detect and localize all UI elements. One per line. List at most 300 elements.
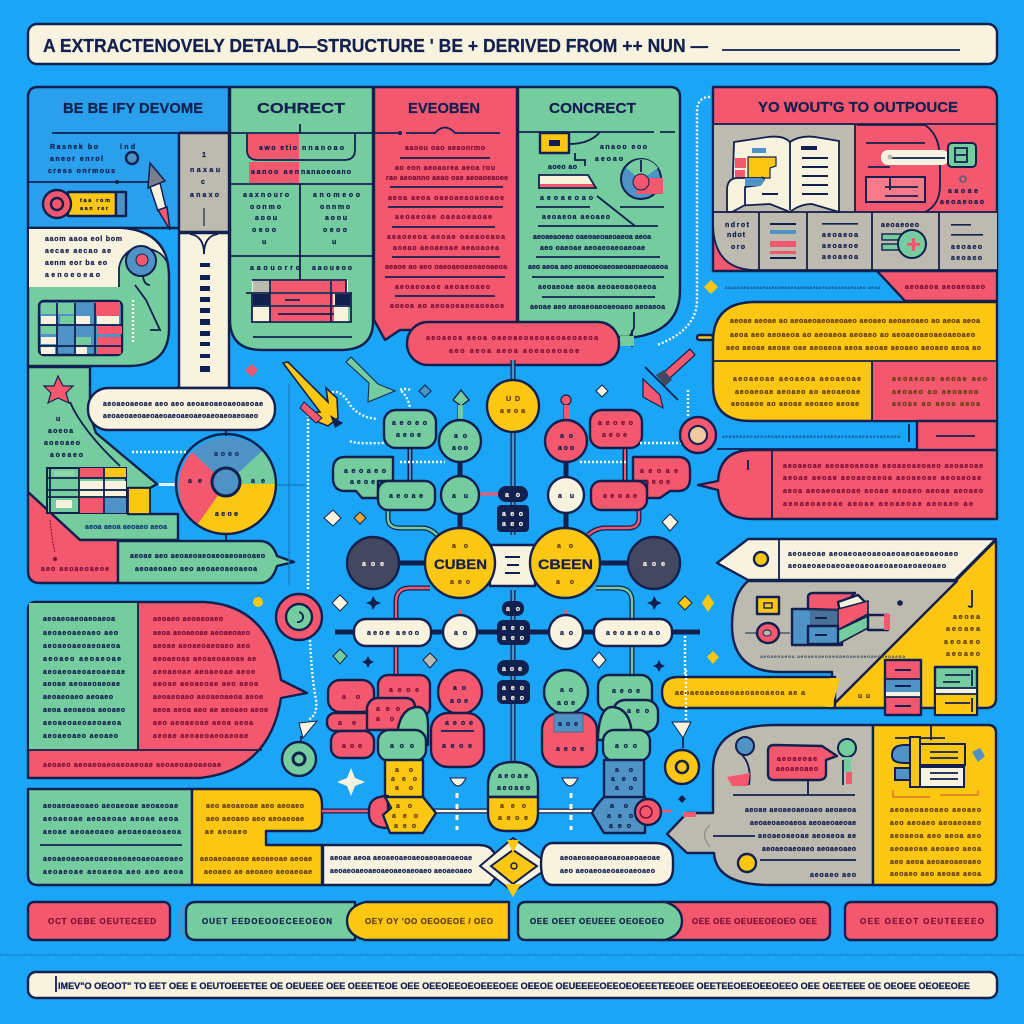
- white wedge icon: [539, 175, 596, 188]
- yellow block text: aeoaeoaeoae aeoaeoae aeoae: [200, 856, 312, 863]
- cream block text: aeoae aeoa aeoaeoaeoaeoaeoaeoaeoae: [330, 855, 472, 862]
- red boxes: aeoe: [645, 479, 670, 486]
- lower right green and blue stack: aeoe: [612, 688, 640, 695]
- panel: concrete column: aoeo ao: [548, 164, 577, 171]
- lower left red cluster: aeo: [376, 706, 400, 713]
- split red label: awo etio: [259, 145, 297, 152]
- cream pill: aeoaeoaeoae aeo aeo aeoaeoaeoaeoaeoae: [103, 401, 263, 408]
- panel: yellow text block: aeoa aeo aeoaeoa ao aeoaeoa aeoaeo ao aeoaeoaeoaeoaeoaeo: [730, 332, 975, 339]
- panel: correct column: [230, 87, 375, 350]
- grey text lines: [745, 807, 856, 879]
- green node 1: ao: [454, 433, 467, 440]
- icon: yellow square: [757, 597, 779, 614]
- pie chart: ae: [188, 478, 202, 485]
- panel: evidence column: [374, 87, 517, 340]
- yellow side text: aeoaeo: [946, 651, 980, 658]
- green node 1: [439, 420, 481, 462]
- green wedge panel: aoeoa: [48, 428, 73, 435]
- cream pointer: aeoaeoae aeoaeoaeoaeoaeoaeoaeoaeoaeo: [788, 551, 958, 558]
- cream column with vertical index: [179, 233, 229, 388]
- lower left green and yellow stack: [378, 707, 428, 798]
- central pill node: aeoe: [498, 815, 528, 822]
- lower left green and yellow stack: ao: [395, 767, 413, 774]
- title banner: A EXTRACTENOVELY DETALD—STRUCTURE ' BE + DERIVED FROM ++ NUN —: [43, 36, 708, 56]
- green boxes: aeoae: [389, 493, 423, 500]
- cream pointer: [717, 539, 996, 580]
- left dark circle: [347, 537, 399, 589]
- panel: outcome right: YO WOUT'G TO OUTPOUCE: [758, 99, 958, 116]
- dark pill nodes: ao: [505, 492, 520, 499]
- icon: red message bubble: aeoaeoae: [777, 756, 817, 763]
- lower right green and blue stack: ao: [615, 785, 633, 792]
- yellow block text: aeo aeoaeoae aeo aeoaeo: [206, 803, 304, 810]
- panel: red speech block: aeoae aeoae aeoaeoaeoa aeoaeoae aeoaeoae: [783, 475, 981, 482]
- cream label right of diamond: aeo aeoaeoaeoaeoaeoaeo: [560, 868, 655, 875]
- central lower red node: ao: [453, 685, 466, 692]
- two-column text grid: onnmo: [320, 204, 350, 211]
- text lines with rules: [528, 195, 668, 311]
- cream pill: [88, 388, 275, 430]
- pie chart: ae: [251, 478, 265, 485]
- panel: yellow text block: aeoaeoae aeoaeo ao aeoaeoae: [735, 389, 860, 396]
- green text: aeoaeoaeoaeoaeoa: [43, 643, 120, 650]
- cream block text: [330, 855, 472, 875]
- pie chart: [159, 430, 276, 541]
- two-column text grid: anomeoo: [313, 192, 360, 199]
- yellow triangle: [830, 540, 996, 708]
- two-column text grid: aoou: [325, 215, 347, 222]
- white drops and dashes: [450, 778, 578, 830]
- center cream rectangle: [490, 545, 535, 586]
- red summary pill: aeoaeoa aeoa oaeoaeoaeoaeoaeoaeoa: [426, 335, 598, 342]
- blue arrow tag: aeo: [609, 823, 631, 830]
- lower cream circles: ao: [560, 630, 573, 637]
- two-column text grid: aaoueoo: [312, 265, 352, 272]
- central lower green and red node: aoe: [558, 721, 578, 728]
- dark pill nodes: aeo: [502, 695, 524, 702]
- panel: concrete column: anaoo eoo: [600, 144, 647, 151]
- text lines with rules: aeaoe ao aeo oaeoaeoaeoaeoaeoa: [385, 264, 507, 271]
- label: green and red: OEE OEET OEUEEE OEOEOEO: [530, 917, 664, 926]
- grey text lines: aeoaeo aeo: [810, 872, 856, 879]
- green text: [43, 616, 125, 740]
- connectors: [335, 360, 700, 770]
- icon: target left: [276, 594, 322, 640]
- green text: aeoa aeoaeoa aeoaeo: [43, 707, 125, 714]
- dark pill nodes: [497, 486, 530, 704]
- two-column text grid: oonmo: [250, 204, 281, 211]
- green wedge panel: aoeoaeo: [44, 440, 80, 447]
- text lines with rules: aoeoa ao aeoaoeaoeaoeaoe: [390, 303, 504, 310]
- blue header and text area: [28, 87, 230, 228]
- red node 1: [545, 420, 587, 462]
- thin dotted separator: [0, 954, 1024, 956]
- yellow block text: [200, 803, 312, 876]
- lower right green and blue stack: aeo: [627, 708, 649, 715]
- right dark circle: aoe: [643, 561, 665, 568]
- split red label: nnanoao: [302, 145, 344, 152]
- panel: outcome right: [713, 87, 997, 271]
- lower left green and yellow stack: aeo: [391, 776, 417, 783]
- yellow text lines: aeoaeoae aeoaeo aeoa: [890, 846, 981, 853]
- green node 2: au: [452, 493, 468, 500]
- lower left red cluster: aeoe: [389, 687, 419, 694]
- red card with key: [857, 125, 984, 212]
- panel: red speech block: aeoaeoae aeoaeoaeoae aeoaeoaeoaeo aeoaeoae: [783, 463, 983, 470]
- yellow arrow tag: [383, 797, 436, 833]
- row of grey cells: aeoaeoeo: [881, 222, 919, 229]
- icon: stacked books: [246, 280, 352, 322]
- blue caption line: aeoaeoaeoaeoaeoaeoaeoaeoaeoaeoaeoaeoaeoaeoaeoaeoaeo: [722, 434, 900, 439]
- green block text: aeoaeoaeoaeoaeoaeoaeoaeoaeoaeo: [43, 856, 183, 863]
- dark pill nodes: aeo: [502, 625, 524, 632]
- dark pill nodes: aoe: [502, 666, 522, 673]
- yellow arrow tag: ao: [396, 803, 412, 810]
- panel: red speech block: [698, 450, 997, 519]
- label: red one: OCT OEBE OEUTECEED: [48, 917, 156, 926]
- dotted connector top right: [657, 97, 710, 345]
- label: green and yellow: OUET EEDOEOOECEEOEON: [202, 917, 332, 926]
- top yellow node: aeoa: [500, 408, 525, 415]
- lower right green and blue stack: [598, 675, 658, 798]
- grey column: anaxo: [190, 192, 219, 199]
- thin vertical guide: [277, 384, 307, 585]
- text lines with rules: [385, 145, 508, 310]
- text lines with rules: rao aeoanno aeao oae aeoaoeaoee: [386, 175, 508, 182]
- cream pointer: aeoaeoaeoaeoaeoaeoaeoaeoaeoaeoaeo: [788, 563, 946, 570]
- callout panel with table: aenoeoeao: [45, 272, 100, 279]
- red text: aeoae aeoaeoaeoaeo aeo: [153, 643, 250, 650]
- two-column text grid: aaxnouro: [243, 192, 289, 199]
- panel: grey and yellow lower right speech block: [667, 725, 996, 885]
- text lines with rules: aaoou oao aeaonrmo: [405, 145, 485, 152]
- yellow dot: [253, 597, 263, 607]
- yellow block text: aeo aeoaeo aeo aeoaeoae: [206, 816, 304, 823]
- lower left red cluster: ae: [338, 720, 356, 727]
- panel: yellow text block: aeoaeoae aeoae aeo: [892, 376, 987, 383]
- row of grey cells: ndot: [727, 232, 746, 239]
- grey text lines: aeoaeoaeoaeoa aeoaeoaeoae: [750, 820, 856, 827]
- icon: stacked folders: [892, 725, 985, 797]
- red node 1: ao: [560, 433, 573, 440]
- row of grey cells: aeoaeo: [951, 244, 982, 251]
- lower left green and yellow stack: ao: [395, 785, 413, 792]
- left yellow hub: ao: [452, 543, 468, 550]
- badge with yellow label: [43, 190, 126, 218]
- yellow tag icon: [540, 132, 600, 166]
- central flow diagram: [322, 360, 700, 833]
- grey book panel: [714, 124, 855, 212]
- panel: red speech block: aeoa aeoaeoaeoae aeoae aeoaeo aeoae aeoaeo: [783, 488, 983, 495]
- title banner: [28, 24, 997, 64]
- text lines with rules: ao eon aeoaorea aeoa rou: [395, 165, 495, 172]
- lower right green and blue stack: aoo: [615, 743, 637, 750]
- top yellow node: [487, 380, 539, 432]
- icon: red message bubble: aeoaeoaeo: [776, 766, 818, 773]
- central lower red node: aoe: [450, 698, 468, 705]
- cream pill: aeoaeoaeoaeoaeoaeoaeoaeoaeoaeoaeoaeo: [103, 413, 258, 420]
- split red label: aanoo aen: [251, 169, 299, 176]
- red boxes: [590, 410, 690, 510]
- green block text: [43, 803, 183, 876]
- cream label right of diamond: [541, 843, 673, 885]
- green node 1: aoo: [452, 445, 468, 452]
- red text: aeoa aeoa aeo ae aeoaeo aeoe: [153, 707, 268, 714]
- table icon: [39, 301, 122, 355]
- red text: aeoaeo aeoaeoaeo: [153, 616, 223, 623]
- label: green and red: [518, 902, 830, 940]
- mini table: [47, 468, 150, 514]
- text lines with rules: aeoa aeoa oaeoaeaoaoeaoe: [388, 195, 504, 202]
- red text: aeo aeoaeoae aeoa aeoa: [153, 720, 253, 727]
- text lines with rules: aeoaeaoeao oaeoaeoaeoaeoa aeoa: [533, 234, 651, 241]
- red text: aeoae aeoaeoae aeo aeoa: [153, 681, 258, 688]
- central lower green and red node: aoe: [557, 700, 575, 707]
- label: green and yellow: OEY OY 'OO OEOOEOE / OEO: [365, 917, 493, 926]
- two-column text grid: aoou: [255, 215, 277, 222]
- grey text lines: aeoaeoaeoae aeoaeoa ae: [758, 833, 856, 840]
- icon: red star: [44, 376, 73, 403]
- text lines with rules: aoeao aeoaeoae aeaoaoea: [393, 245, 499, 252]
- central lower red node: aeoe: [442, 743, 472, 750]
- lower cream circles: ao: [454, 630, 467, 637]
- panel: concrete column: aeoao: [595, 156, 623, 163]
- yellow flag node lower right: [665, 636, 699, 803]
- central lower red node: aeoe: [445, 720, 473, 727]
- two-column text grid: [243, 192, 360, 272]
- two-column text grid: u: [262, 239, 266, 246]
- green boxes: aeoeo: [392, 420, 427, 427]
- bottom label row: [28, 902, 997, 940]
- row of grey cells: aeoaeoe: [822, 243, 858, 250]
- row of grey cells: oro: [731, 244, 745, 251]
- white dotted connector left: [132, 415, 316, 720]
- icon: green node with flag: [282, 721, 317, 776]
- blue header and text area: Rasnek bo: [50, 144, 98, 151]
- row of grey cells: ndrot: [725, 222, 750, 229]
- green text: aeoaeoaeoaeoaeoa: [43, 616, 115, 623]
- red angled strip with caption: aeoaeoa aeoaeoaeo: [905, 284, 985, 291]
- right yellow hub: [530, 528, 600, 598]
- yellow side text: uu: [858, 693, 870, 700]
- text lines with rules: aeaoeeoa aeoae oaeaoeaoa: [387, 234, 505, 241]
- lower left red cluster: [327, 675, 430, 758]
- panel: yellow text block: aeoaeoae aeoaeoa aeoaeoae: [733, 376, 861, 383]
- label: red right: [845, 902, 997, 940]
- text lines with rules: aeo aeoa aeo aoeaoeoaeoaeoaeoaeoaeoa: [528, 264, 668, 271]
- label: green and yellow: [186, 902, 509, 940]
- split red label: [247, 134, 355, 183]
- yellow text lines: aeoaeoa aeo aeoa aeo: [890, 833, 981, 840]
- green wedge panel: aoeaeo: [50, 452, 83, 459]
- file cards: [885, 660, 977, 715]
- label: red one: [28, 902, 170, 940]
- panel: yellow text block: aeoae aeoae ao aeoaeoaeoaeoaeo aeoaeo aeoaeoaeo ao aeoa aeoa: [730, 318, 980, 325]
- red card with key: aaoae: [948, 188, 978, 195]
- blue arrow tag: aeo: [607, 813, 633, 820]
- lower right green and blue stack: ao: [615, 767, 633, 774]
- grey column: naxau: [190, 167, 220, 174]
- two-column text grid: oeoo: [252, 227, 276, 234]
- grey section: [732, 581, 957, 708]
- icon: red brush pointer: [643, 349, 695, 408]
- red text: aeoaeo aeoaeoaeoaeoaeoae aeoaeoaeoaeoae: [43, 762, 221, 769]
- blue arrow tag: [592, 797, 645, 833]
- red text: aeoaeoae aeoaeoae aeoe: [153, 669, 255, 676]
- blue header and text area: cress onrmous: [48, 168, 115, 175]
- red boxes: aeoae: [640, 468, 678, 475]
- red corner: [28, 492, 118, 583]
- panel: yellow text block: [697, 302, 997, 421]
- icon: central gold diamond: [480, 838, 551, 897]
- callout panel with table: aaom aaoa eol bom: [45, 236, 122, 243]
- dark pill nodes: aeo: [502, 511, 523, 518]
- left yellow hub: [425, 528, 495, 598]
- green wedge panel: [28, 367, 178, 540]
- yellow side text: aeoea: [953, 614, 980, 621]
- text lines with rules: aeoaeoao: [540, 195, 593, 202]
- footer banner: [28, 972, 997, 998]
- badge with yellow label: aan rer: [80, 206, 109, 212]
- icon: yellow arrow pointer: [283, 362, 343, 428]
- lower left red cluster: aoe: [342, 743, 362, 750]
- text lines with rules: aeoae aeo aeoaeoaeoaeoaeo aeoaeoa: [530, 304, 665, 311]
- panel: lower-left speech block: [28, 602, 307, 778]
- left dark circle: aoe: [362, 561, 384, 568]
- small diamonds and sparkles: [245, 364, 719, 817]
- panel: bottom left multi-color block: [28, 789, 505, 885]
- icon: blue balloon with chair: [727, 737, 754, 786]
- green wedge panel: u: [56, 416, 60, 423]
- panel: evidence column: EVEOBEN: [408, 100, 480, 117]
- yellow text lines: aeo aeoaeo aeoaeoaeo: [890, 820, 981, 827]
- red node 1: aoo: [558, 445, 574, 452]
- dark pill nodes: aeo: [502, 685, 524, 692]
- grey text lines: aeoae aeoaeoaeoaeo aeoaeoa: [745, 807, 856, 814]
- icon: red message bubble: [768, 745, 837, 780]
- panel: pointer with grey and yellow section: [717, 539, 996, 715]
- green speech bubble: aeoaeoaeo aeo aeoaeoaeoaeoa: [135, 566, 257, 573]
- yellow block text: ae aeoaeo: [205, 829, 247, 836]
- icon: book stack: [792, 593, 890, 645]
- panel: concrete column: [518, 87, 680, 347]
- icon: red target right: [680, 390, 716, 453]
- green speech bubble: aeoae aeo aeoaeoaeoaeoaeoaeoaeo: [130, 553, 265, 560]
- yellow text lines: aeo aeoa aeoaeoaeoaeo: [890, 859, 981, 866]
- panel: red speech block: aeoaeoaeoae aeoae aeoaeoae aeoaeo ae: [783, 501, 973, 508]
- text lines with rules: aeoaeoae aeoa aeoaeoaeoaeoa: [538, 284, 656, 291]
- panel: yellow text block: aeo aeoae aeoae oae aeoaeoa aeoa aeoae aeoaeo aeoaeo aeoa ao: [726, 345, 981, 352]
- callout panel with table: aenm eor ba eo: [45, 260, 107, 267]
- blue header and text area: BE BE IFY DEVOME: [63, 100, 203, 117]
- yellow pill label: aeoaeoaeoaeoaeoaeoaeoa ae a: [675, 690, 805, 697]
- two-column text grid: aaouorro: [250, 265, 300, 272]
- blue header and text area: aneor enrol: [50, 156, 103, 163]
- cream label right of diamond: aeoaeoaeoaeoaeoaeoaeoae: [560, 855, 660, 862]
- red boxes: aeoeo: [598, 420, 633, 427]
- green node 2: [441, 476, 479, 514]
- green block text: aeoaeoae aeoaeoa aeo aeo aeoa: [43, 869, 183, 876]
- left yellow hub: aeo: [450, 579, 470, 586]
- grey column: [179, 133, 229, 232]
- label: green and red: OEE OEE OEUEEOEOEO OEE: [692, 917, 818, 926]
- right dark circle: [628, 537, 680, 589]
- icon: green pin: [838, 739, 856, 785]
- blue caption line: [717, 424, 917, 449]
- red boxes: aeoe: [602, 432, 627, 439]
- red summary pill: [407, 322, 619, 365]
- icon: yellow diamond with text: [704, 280, 880, 294]
- row of grey cells: aeoaeo: [951, 255, 982, 262]
- green text: aeoaeoaeo aeoaeo: [43, 733, 118, 740]
- icon: red node: [745, 623, 790, 643]
- cream node: au: [558, 493, 574, 500]
- two-column text grid: u: [332, 239, 336, 246]
- green speech bubble: [118, 541, 294, 583]
- central pill node: aeoae: [498, 773, 528, 780]
- grey column: c: [201, 179, 205, 186]
- callout panel with table: aecae aecao ae: [45, 248, 111, 255]
- horizontal baseline with red and cream segments: [322, 808, 672, 814]
- green boxes: aeoe: [350, 479, 375, 486]
- badge with yellow label: taa rom: [80, 198, 110, 204]
- green text: aeoaeo aeoaeoae: [43, 656, 121, 663]
- split red label: nanaoeoano: [301, 169, 351, 176]
- grey column: 1: [202, 152, 206, 159]
- blue header and text area: ind: [120, 144, 135, 151]
- text lines with rules: aeoaeoaoe aeoaeoaeo: [395, 284, 490, 291]
- dark pill nodes: aeo: [502, 521, 523, 528]
- red text: aeoaeoae aeoaeoaeoae ae: [153, 656, 256, 663]
- icon: yellow diamond with text: aaaaoaeoaeoaeoaeoaeoaeoaoeaoeaoeaoeoaeoaeoaeo aeoa: [725, 285, 880, 290]
- panel: star, pie and table section: aeoa aeoa aeoaeo aeoa: [85, 524, 167, 531]
- yellow side text: aeoaeo: [944, 639, 980, 646]
- lower left red cluster: ao: [342, 694, 360, 701]
- lower left red cluster: ao: [376, 716, 394, 723]
- red text: aeoa aeoaeoae aeoaeoaeo: [153, 630, 250, 637]
- panel: correct column: COHRECT: [257, 100, 345, 117]
- red angled strip with caption: [877, 271, 997, 301]
- red ring left: [369, 796, 388, 828]
- green boxes: [333, 410, 436, 510]
- panel: star, pie and table section: [28, 367, 294, 583]
- yellow arrow tag: aeo: [392, 813, 418, 820]
- green block text: aeoaeoae aeoaeoae aeoae aeoa: [43, 816, 178, 823]
- panel: concrete column: CONCRECT: [549, 100, 636, 117]
- row of grey cells: aeoaeoa: [822, 254, 858, 261]
- lower left green and yellow stack: aoo: [390, 743, 414, 750]
- callout panel with table: [28, 228, 169, 366]
- panel: left column top section: [28, 87, 230, 388]
- gauge icon: [621, 159, 663, 199]
- yellow pill label: [662, 677, 840, 708]
- blue arrow tag: ao: [610, 803, 628, 810]
- top yellow node: UD: [506, 396, 520, 403]
- dark pill nodes: ao: [506, 606, 520, 613]
- central lower green and red node: ao: [560, 687, 573, 694]
- panel: yellow text block: aeoae ao aeoa aeoa: [892, 401, 980, 408]
- yellow arrow tag: aeo: [394, 823, 416, 830]
- yellow dot with line: [738, 854, 856, 872]
- small blue connector: [179, 905, 186, 938]
- icon: green wedge pointer: [346, 357, 395, 402]
- green block text: aeoaeoaeoaeo aeoaeoae aeoaeoae: [43, 803, 178, 810]
- red label strip: [917, 421, 997, 451]
- panel: pointer with grey and yellow section: aeoaeoaeoa aeoaeoaeoaeoaeoaeoaeoaeoaeoaeoa: [760, 655, 905, 660]
- pie chart: aeoe: [215, 511, 238, 518]
- text lines with rules: aeoaeoa aeoaeo: [542, 214, 610, 221]
- red summary pill: aeo aeoa aeoa aoeaoeoaoe: [449, 348, 579, 355]
